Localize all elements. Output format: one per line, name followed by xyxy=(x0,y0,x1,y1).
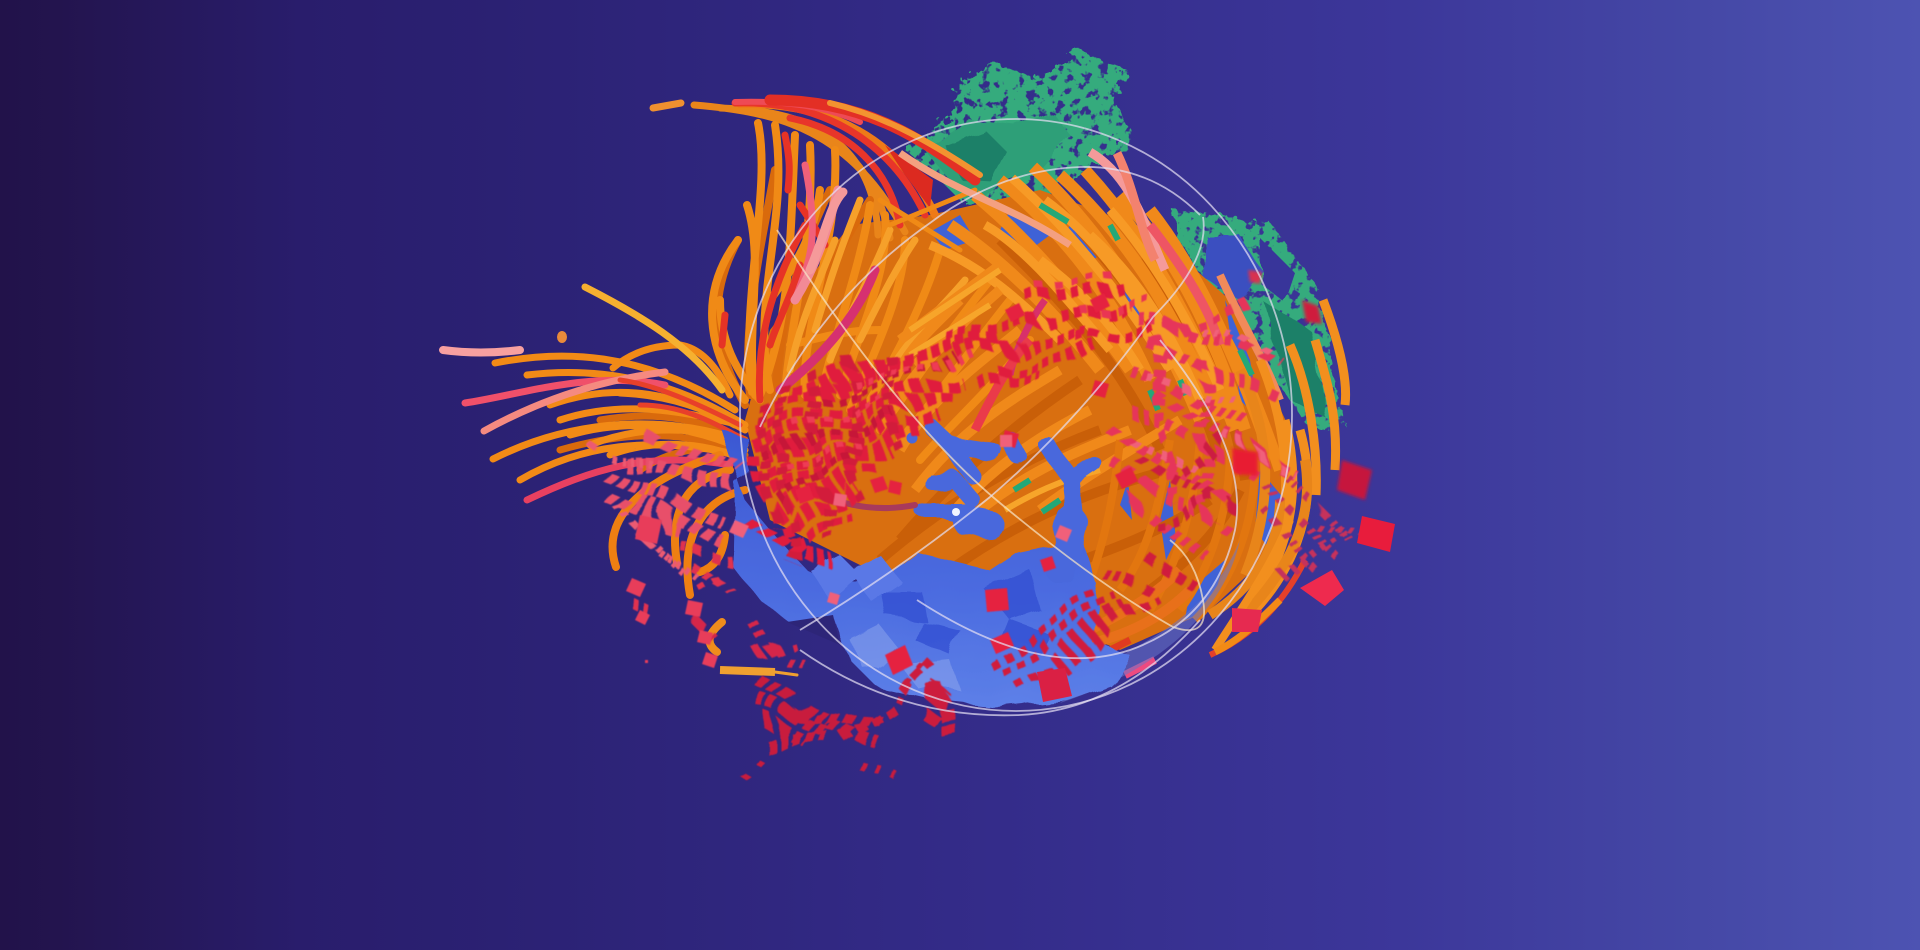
bowl lower right cluster xyxy=(985,560,1200,690)
lower scatter below bowl xyxy=(758,680,895,745)
cube: blurred middle xyxy=(1232,448,1258,476)
right pink scatter xyxy=(1110,300,1290,560)
cube: lower right xyxy=(1232,608,1262,632)
blue bowl fluid xyxy=(722,430,1130,707)
left fan strands xyxy=(443,287,797,675)
upper cluster xyxy=(950,285,1160,385)
cube: upper right xyxy=(1337,460,1372,500)
red wedge xyxy=(885,145,933,208)
diagonal arc two xyxy=(800,217,1204,630)
upper arc xyxy=(760,167,1200,427)
orange strand core mass xyxy=(745,190,1290,650)
maroon rod xyxy=(845,503,915,508)
left pink cluster xyxy=(600,440,745,540)
cube: blurred in green xyxy=(1302,300,1322,324)
hand placed cubes xyxy=(626,293,1138,675)
red cube clusters xyxy=(590,270,1360,780)
glass bowl of the sphere xyxy=(1060,540,1240,703)
cube: right lower xyxy=(1300,570,1344,606)
cube: bottom xyxy=(1037,668,1072,702)
diagonal arc one xyxy=(777,230,1204,630)
pale blue ball xyxy=(906,432,918,444)
cube: small in green xyxy=(1248,270,1262,284)
blue gaps behind strands xyxy=(930,210,1285,620)
large red cubes xyxy=(1037,270,1395,702)
inner right arc xyxy=(917,340,1237,658)
vertical fan strands xyxy=(712,123,1030,460)
white sphere rings xyxy=(740,119,1292,715)
bright central cluster xyxy=(745,340,1000,560)
blue branch highlights xyxy=(952,508,960,516)
cube: right xyxy=(1357,516,1395,552)
swoop strands at top left xyxy=(653,100,980,238)
scatter past right edge xyxy=(1260,470,1360,580)
blue branching trees xyxy=(925,428,1092,570)
green particle cloud xyxy=(905,50,1345,430)
dark notch in bowl xyxy=(787,615,840,645)
lower arc xyxy=(800,620,1200,715)
outer ring xyxy=(740,119,1292,711)
main swirl strands xyxy=(880,152,1280,620)
green cloud solid interior xyxy=(925,110,1328,420)
right outer arc strands xyxy=(1060,300,1346,675)
